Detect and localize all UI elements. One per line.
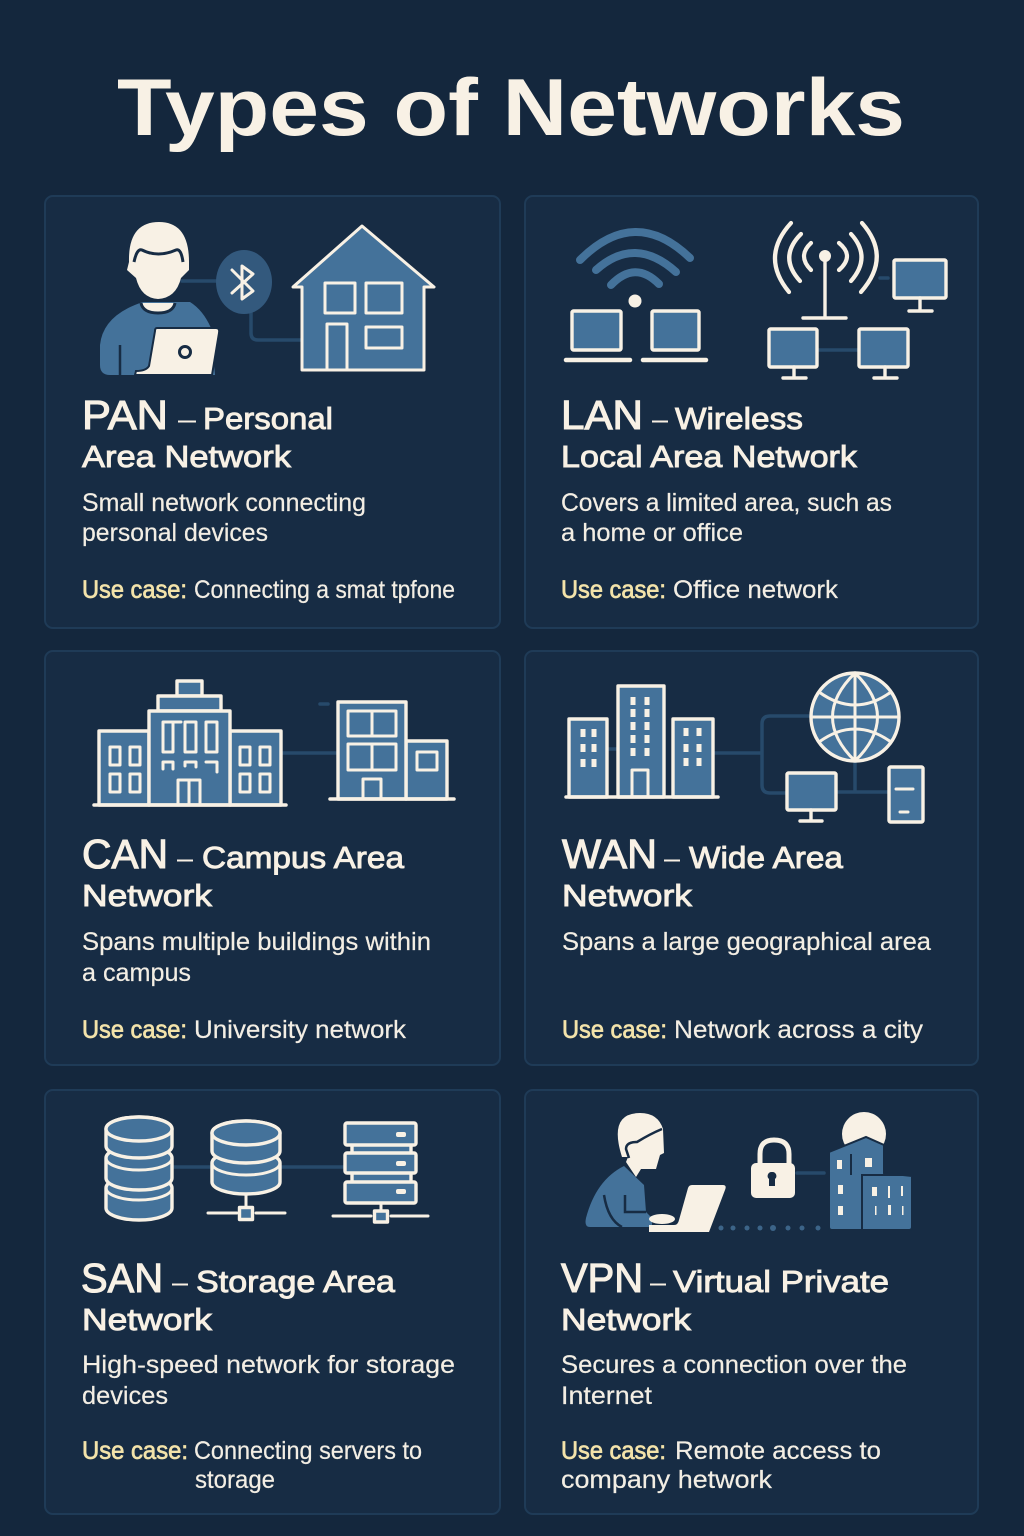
description: a home or office: [561, 519, 743, 547]
use case: University network: [194, 1016, 407, 1044]
title: Types of Networks: [117, 63, 905, 153]
description: [82, 489, 366, 547]
use case: [82, 576, 455, 604]
heading: LAN: –: [652, 403, 668, 436]
icon: person with laptop, bluetooth and house: [100, 222, 436, 375]
panel: PAN: [45, 196, 500, 628]
description: Spans multiple buildings within: [82, 928, 431, 956]
description: devices: [82, 1382, 168, 1410]
heading: CAN: CAN: [82, 831, 168, 877]
icon: padlock: [751, 1140, 824, 1198]
heading: LAN: [561, 392, 858, 474]
use case: [82, 1437, 422, 1494]
use case: Use case:: [561, 576, 666, 604]
heading: SAN: SAN: [81, 1255, 163, 1301]
use case: [561, 576, 839, 604]
icon: city buildings: [566, 686, 761, 797]
description: a campus: [82, 959, 191, 987]
heading: PAN: –: [178, 403, 196, 436]
panel: VPN: [525, 1090, 978, 1514]
heading: VPN: –: [650, 1266, 666, 1299]
icon: wifi with laptops: [566, 232, 706, 360]
description: Internet: [561, 1382, 652, 1410]
heading: PAN: Area Network: [82, 439, 292, 474]
description: Covers a limited area, such as: [561, 489, 892, 517]
dotted connection: [718, 1225, 820, 1231]
heading: CAN: Network: [82, 878, 213, 913]
use case: Network across a city: [674, 1016, 924, 1044]
use case: Use case:: [82, 1437, 188, 1465]
use case: Use case:: [561, 1437, 666, 1465]
heading: WAN: WAN: [562, 831, 657, 877]
heading: SAN: [81, 1255, 396, 1337]
icon: globe with monitor and server: [762, 673, 923, 822]
heading: SAN: Network: [82, 1302, 213, 1337]
heading: WAN: Network: [562, 878, 693, 913]
use case: Connecting servers to: [194, 1437, 422, 1465]
panel: LAN: [525, 196, 978, 628]
heading: VPN: [561, 1255, 889, 1337]
heading: PAN: Personal: [203, 401, 333, 436]
heading: VPN: Virtual Private: [673, 1264, 889, 1299]
icon: remote user: [586, 1113, 726, 1232]
use case: Use case:: [82, 1016, 187, 1044]
panel: CAN: [45, 651, 500, 1065]
heading: LAN: Local Area Network: [561, 439, 858, 474]
icon: campus buildings: [94, 681, 454, 805]
icon: company building: [829, 1112, 912, 1230]
description: Small network connecting: [82, 489, 366, 517]
heading: SAN: –: [172, 1266, 188, 1299]
heading: SAN: Storage Area: [196, 1264, 396, 1299]
panel: SAN: [45, 1090, 500, 1514]
icon: bluetooth badge: [216, 250, 272, 314]
description: Secures a connection over the: [561, 1351, 907, 1379]
use case: Use case:: [82, 576, 187, 604]
heading: WAN: [562, 831, 844, 913]
use case: storage: [195, 1466, 275, 1494]
description: High-speed network for storage: [82, 1351, 455, 1379]
heading: LAN: LAN: [561, 392, 643, 438]
use case: [82, 1016, 407, 1044]
heading: VPN: VPN: [561, 1255, 643, 1301]
heading: VPN: Network: [561, 1302, 692, 1337]
heading: WAN: –: [664, 842, 680, 875]
heading: PAN: [82, 392, 333, 474]
heading: PAN: PAN: [82, 392, 168, 438]
description: Spans a large geographical area: [562, 928, 931, 956]
use case: Remote access to: [675, 1437, 881, 1465]
description: [561, 1351, 907, 1410]
use case: [561, 1437, 881, 1494]
use case: Use case:: [562, 1016, 667, 1044]
heading: WAN: Wide Area: [689, 840, 844, 875]
heading: CAN: –: [177, 842, 193, 875]
use case: [562, 1016, 924, 1044]
icon: storage and servers: [106, 1117, 428, 1222]
description: [561, 489, 892, 547]
heading: CAN: Campus Area: [202, 840, 405, 875]
use case: Connecting a smat tpfone: [194, 576, 455, 604]
use case: company hetwork: [561, 1466, 773, 1494]
heading: LAN: Wireless: [675, 401, 803, 436]
description: [82, 928, 431, 987]
description: [82, 1351, 455, 1410]
panel: WAN: [525, 651, 978, 1065]
heading: CAN: [82, 831, 405, 913]
description: personal devices: [82, 519, 268, 547]
use case: Office network: [673, 576, 839, 604]
icon: antenna with monitors: [769, 223, 946, 378]
